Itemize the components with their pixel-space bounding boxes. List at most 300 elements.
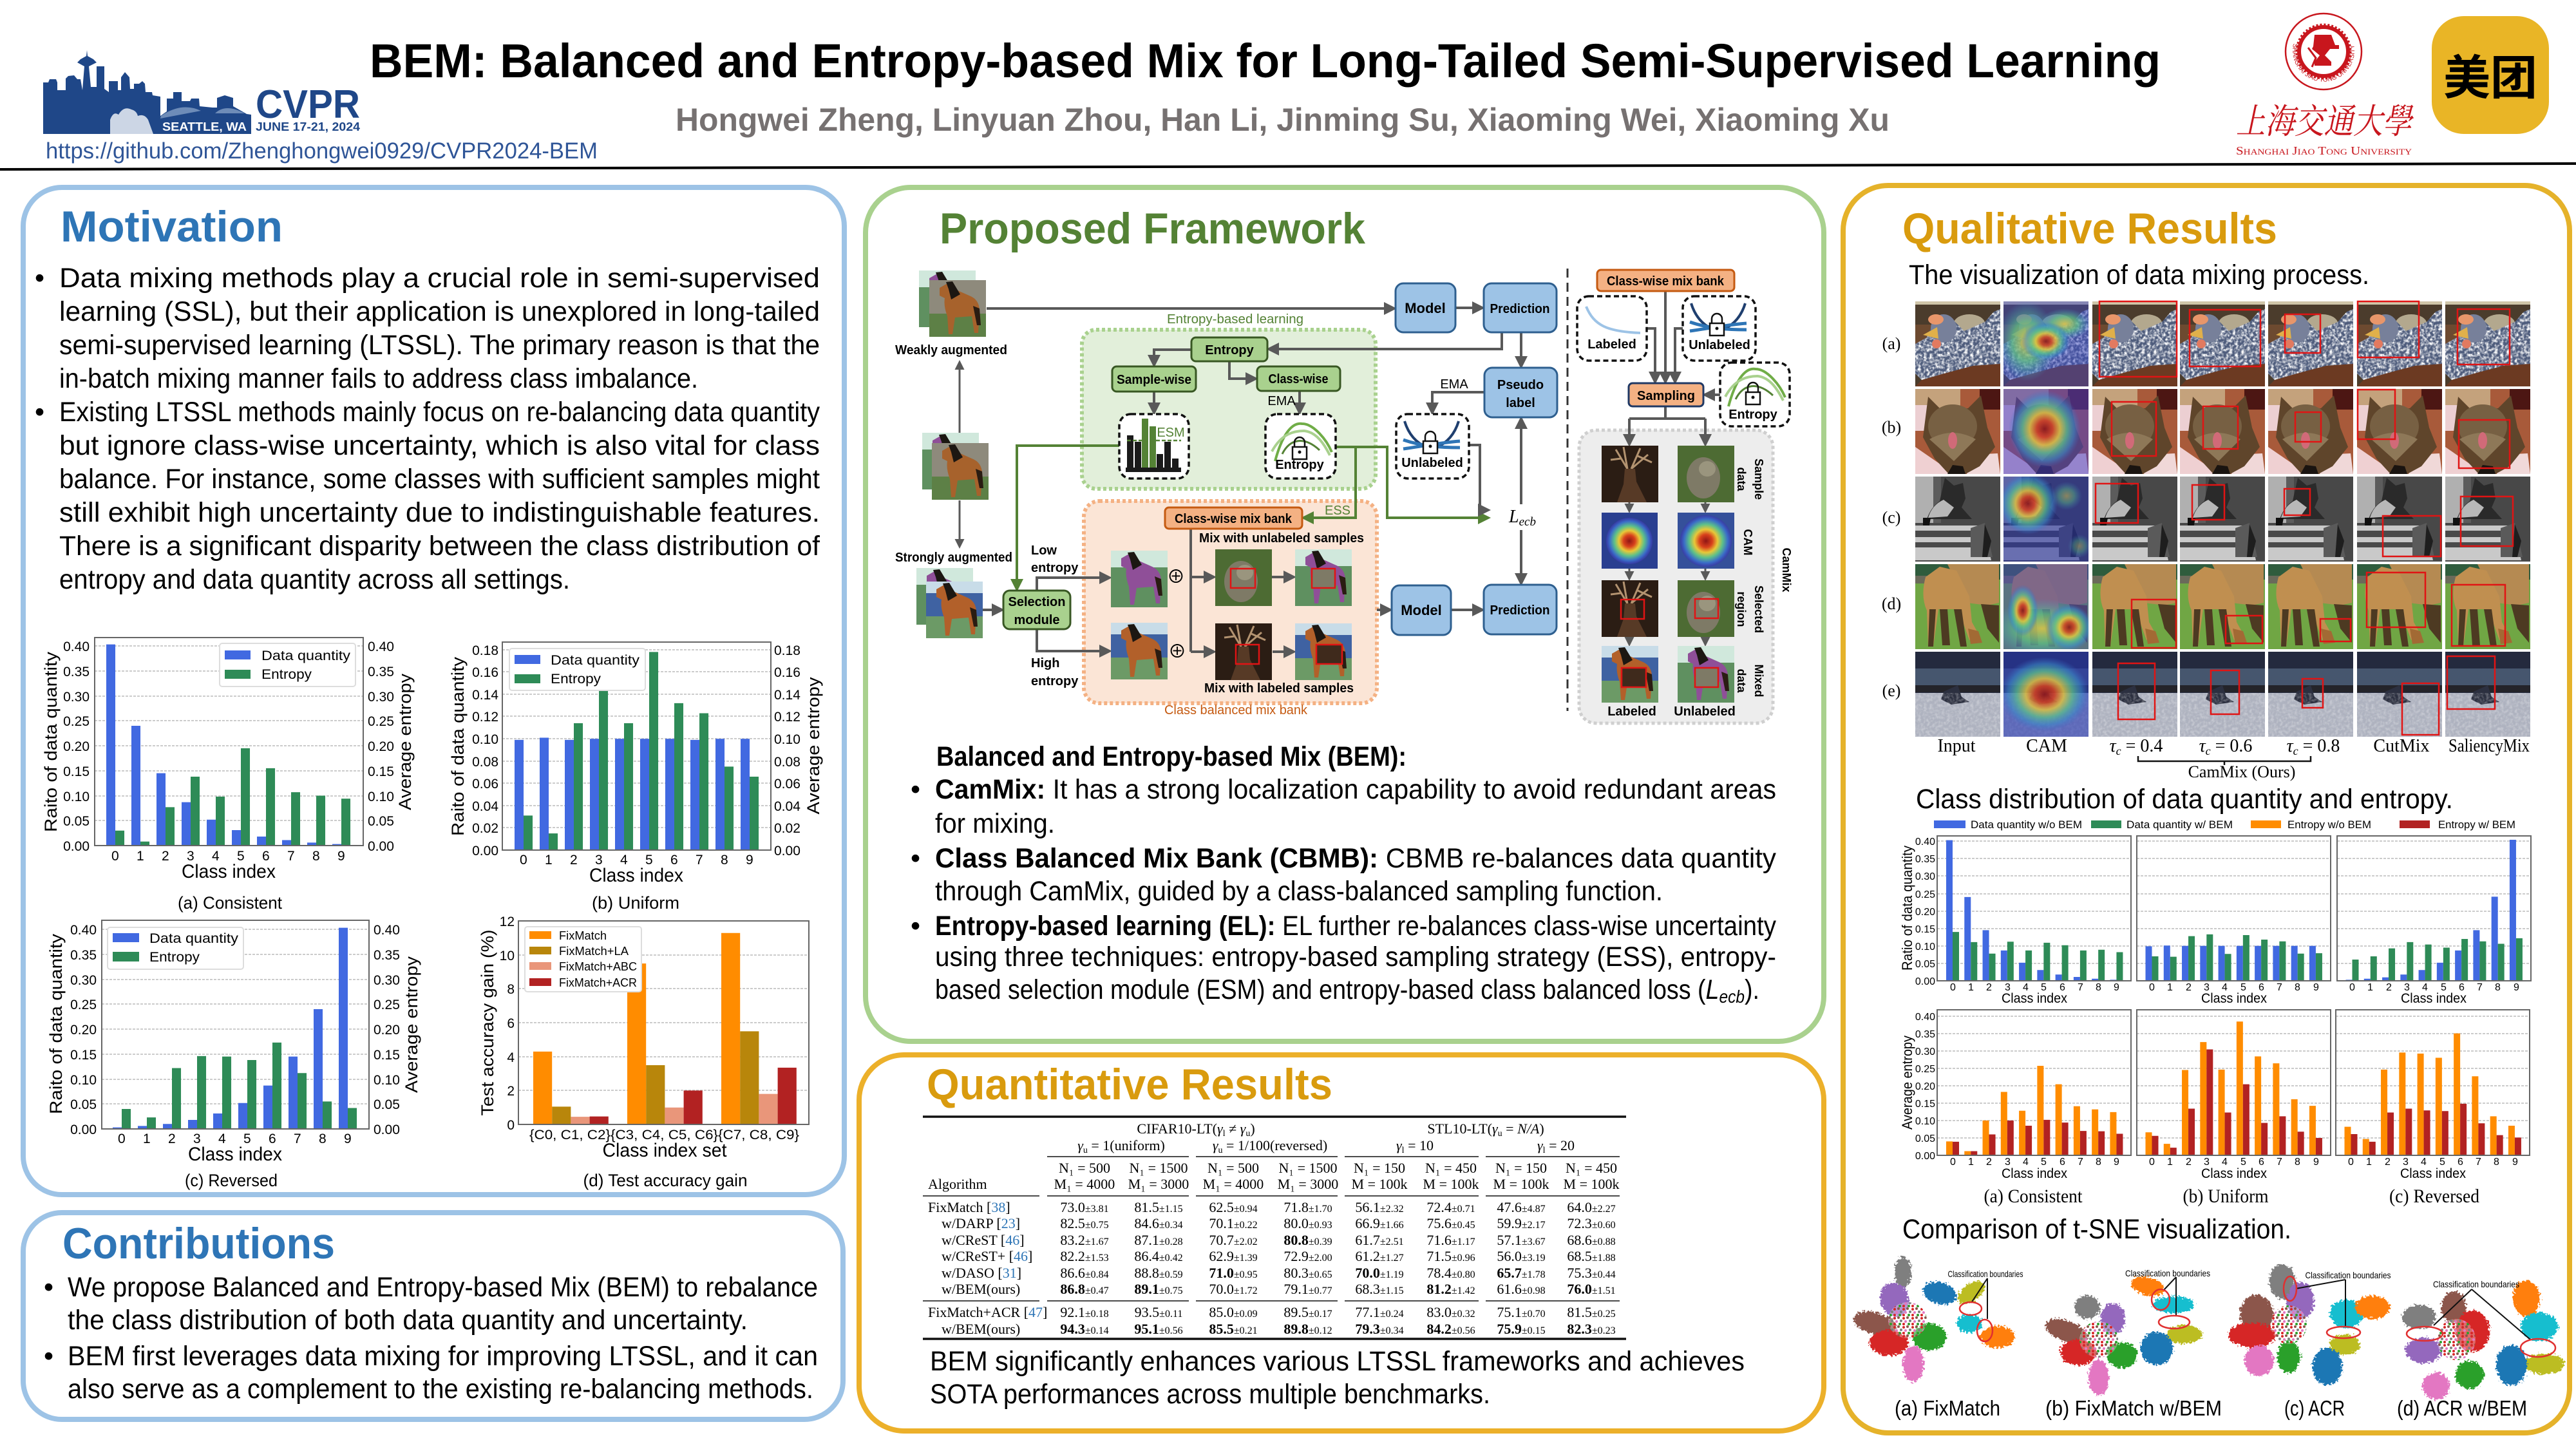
legend: chart a: Data quantity [261,649,351,663]
label: mix with unlabeled samples: Mix with unlabeled samples [1199,531,1364,545]
column labels: CutMix [2373,736,2430,756]
captions: t-SNE: (c) ACR [2284,1396,2345,1420]
subheading: t-SNE: Comparison of t-SNE visualization. [1902,1214,2291,1245]
caption: chart b: (b) Uniform [592,893,679,913]
table: results: 47.6±4.87 [1497,1199,1546,1215]
table: results: 68.3±1.15 [1355,1281,1404,1297]
brace: cammix ours [2138,756,2311,781]
scatter: t-SNE ACR w/BEM [2402,1279,2564,1399]
icon: unlabeled cammix [1683,296,1756,361]
table: results: 76.0±1.51 [1567,1281,1616,1297]
labels: entropy routes: Low [1031,544,1057,558]
table: results: 80.0±0.93 [1283,1215,1332,1231]
images: input samples [922,433,989,500]
header rule [0,164,2576,169]
bar chart: (b) uniform: 0.18 [472,643,498,658]
node: selection module: Selection [1009,595,1065,609]
icon: labeled [1577,296,1647,361]
text block: motivation: but ignore class-wise uncertainty, which is also vital for class [59,430,820,461]
labels: entropy routes [1031,544,1079,688]
caption: chart d: (d) Test accuracy gain [583,1171,747,1190]
bar chart: (c) reversed: Class index [188,1144,282,1165]
legend: chart c: Entropy [149,950,200,965]
node: class-wise mix bank [1165,504,1350,529]
panel: qualitative results [1843,185,2570,1433]
node: class-wise mix bank: Class-wise mix bank [1175,512,1293,526]
table: results: 70.0±1.19 [1355,1265,1404,1281]
panel: motivation [23,187,844,1195]
region: entropy-based learning: Entropy-based learning [1167,312,1303,327]
logo: Shanghai Jiao Tong University [2236,13,2414,157]
row labels: (a) [1882,334,1900,353]
table: results: 82.2±1.53 [1060,1248,1109,1264]
captions: t-SNE: (b) FixMatch w/BEM [2045,1396,2222,1420]
table: results: u [1083,1146,1088,1155]
bar chart: (c) reversed: Average entropy [402,956,421,1093]
bar chart: data quantity uniform: Class index [2201,991,2267,1006]
bar chart: (a) consistent: Class index [182,861,276,882]
bar chart: (c) reversed: 0.35 [70,948,97,963]
labels: EMA [1267,377,1468,408]
bar chart: (c) reversed: 0.25 [374,998,400,1012]
table: results: 72.9±2.00 [1283,1248,1332,1264]
bar chart: (c) reversed: 0.00 [70,1122,97,1137]
table: results: 85.5±0.21 [1209,1321,1258,1337]
column labels [1937,736,2530,757]
heading: proposed framework: Proposed Framework [940,204,1365,253]
table: results: 61.2±1.27 [1355,1248,1404,1264]
bar chart: (a) consistent [41,638,415,913]
legend: chart d [525,927,641,992]
bar chart: (a) consistent: 0.15 [368,764,394,779]
region: entropy-based learning [1082,312,1376,489]
table: results: 71.8±1.70 [1283,1199,1332,1215]
images: weakly augmented samples: Weakly augmented [895,343,1007,357]
captions: distribution charts: (c) Reversed [2389,1186,2479,1207]
table: results: 59.9±2.17 [1497,1215,1546,1231]
bar chart: (c) reversed: 0.15 [70,1048,97,1063]
bar chart: data quantity consistent: 0123456789 [1950,982,2119,993]
table: results: w/CReST+ [46] [942,1248,1032,1264]
bar chart: entropy consistent: 0.10 [1915,1116,1935,1127]
logo: Meituan: 美团 [2443,52,2537,104]
heading: motivation: Motivation [61,202,283,251]
table: results: 86.4±0.42 [1134,1248,1183,1264]
region: class balanced mix bank [1084,501,1377,717]
bar chart: (a) consistent: 0.20 [368,739,394,754]
bar chart: (d) test accuracy gain: 4 [507,1050,515,1065]
icon: entropy: Entropy [1275,458,1325,472]
repository link: https://github.com/Zhenghongwei0929/CVPR2024-BEM [46,138,598,164]
legend: chart a: Entropy [261,667,312,682]
table: results: 75.3±0.44 [1567,1265,1616,1281]
bar chart: (c) reversed: 0.40 [374,923,400,938]
table: results: = 10 [1405,1137,1434,1153]
bar chart: (b) uniform: 0.00 [774,844,800,858]
images: weakly augmented samples [895,270,1007,357]
table: results: FixMatch+ACR [47] [928,1304,1047,1320]
title: BEM: Balanced and Entropy-based Mix for Long-Tailed Semi-Supervised Learning [370,34,2161,88]
icon: entropy [1265,414,1336,478]
row labels: (e) [1882,681,1900,700]
table: results: 62.9±1.39 [1209,1248,1258,1264]
bar chart: (b) uniform: 0.12 [472,710,498,724]
brace: cammix ours: CamMix (Ours) [2188,762,2295,781]
legend: chart b: Data quantity [551,653,640,668]
scatter: t-SNE ACR w/BEM: Classification boundaries [2433,1279,2519,1289]
table: results: l [1223,1129,1226,1139]
text block: BEM summary: Balanced and Entropy-based Mix (BEM): [936,741,1406,772]
text block: contributions: also serve as a complement to the existing re-balancing methods. [68,1374,813,1405]
heading: qualitative results: Qualitative Results [1902,204,2277,253]
bar chart: entropy consistent: 0.05 [1915,1133,1935,1144]
text block: quantitative conclusion: SOTA performances across multiple benchmarks. [930,1379,1490,1410]
table: results: 70.0±1.72 [1209,1281,1258,1297]
labels: EMA: EMA [1267,394,1296,408]
labels: cammix rotated: region [1735,591,1748,627]
text block: BEM summary: • [911,911,920,942]
text block: motivation: still exhibit high uncertainty due to indistinguishable features. [59,497,820,528]
bar chart: (b) uniform: 0123456789 [520,853,753,867]
node: model bottom [1392,585,1451,635]
subheading: class distribution: Class distribution of data quantity and entropy. [1916,784,2453,815]
table: results: γ [1240,1121,1247,1137]
bar chart: entropy uniform [2137,1010,2331,1181]
region: class balanced mix bank: Class balanced mix bank [1164,703,1308,717]
table: results: u [1245,1129,1250,1139]
table: results: N₁ = 450 [1425,1160,1477,1176]
node: prediction bottom: Prediction [1490,603,1549,618]
text block: motivation: • [35,263,44,294]
bar chart: (b) uniform: 0.14 [774,688,800,703]
node: sample-wise [1112,366,1196,392]
table: results: 89.1±0.75 [1134,1281,1183,1297]
text block: BEM summary: • [911,774,920,805]
bar chart: entropy consistent [1899,1010,2131,1181]
bar chart: (a) consistent: 0.20 [63,739,90,754]
labels: cammix rotated: Selected [1752,585,1765,633]
images: strongly augmented samples [895,551,1012,638]
table: results: 86.8±0.47 [1060,1281,1109,1297]
table: results: 75.1±0.70 [1497,1304,1546,1320]
bar chart: (b) uniform: 0.06 [472,777,498,791]
text block: contributions: the class distribution of both data quantity and uncertainty. [68,1305,748,1336]
table: results: M₁ = 4000 [1203,1176,1264,1192]
row c [1915,473,2530,562]
labels: cammix rotated: data [1735,668,1748,693]
captions: distribution charts [1984,1186,2479,1207]
node: selection module: module [1014,613,1060,627]
table: results: ≠ [1226,1121,1240,1137]
bar chart: (b) uniform: 0.18 [774,643,800,658]
bar chart: (b) uniform: 0.08 [774,755,800,770]
text block: motivation: Data mixing methods play a crucial role in semi-supervised [59,263,820,294]
table: results [923,1117,1626,1339]
table: results: γ [1537,1137,1544,1153]
node: model bottom: Model [1401,602,1442,618]
legend: chart c: Data quantity [149,931,239,946]
bar chart: (b) uniform: Class index [589,865,683,886]
column labels: c [2116,744,2121,757]
authors: Hongwei Zheng, Linyuan Zhou, Han Li, Jinming Su, Xiaoming Wei, Xiaoming Xu [676,102,1889,138]
bar chart: (c) reversed: 0.30 [70,973,97,988]
bar chart: entropy consistent: Class index [2002,1166,2067,1181]
text block: BEM summary: • [911,843,920,874]
icon: entropy cammix: Entropy [1728,408,1778,422]
labels: cammix rotated: CAM [1741,529,1754,555]
legend: chart d: FixMatch [559,929,607,942]
images: strongly augmented samples: Strongly augmented [895,551,1012,565]
table: results: 72.4±0.71 [1426,1199,1475,1215]
logo: CVPR: CVPR [256,82,360,127]
table: results: 89.8±0.12 [1283,1321,1332,1337]
bar chart: (a) consistent: 0.25 [368,714,394,729]
table: results: 94.3±0.14 [1060,1321,1109,1337]
legend: chart b [509,649,645,690]
bar chart: (c) reversed: 0.15 [374,1048,400,1063]
bar chart: (b) uniform: 0.16 [472,665,498,680]
table: results: γ [1077,1137,1084,1153]
table: results: 79.3±0.34 [1355,1321,1404,1337]
bar chart: (d) test accuracy gain: Test accuracy gain (%) [478,930,497,1115]
node: prediction top: Prediction [1490,302,1549,316]
bar chart: entropy consistent: 0.20 [1915,1081,1935,1092]
scatter: t-SNE ACR: Classification boundaries [2306,1270,2391,1280]
arrows: framework flow [960,291,1720,652]
text block: motivation: entropy and data quantity across all settings. [59,564,570,595]
bar chart: (c) reversed: 0.40 [70,923,97,938]
bar chart: (d) test accuracy gain [478,914,809,1190]
panel: contributions [23,1213,843,1419]
bar chart: (d) test accuracy gain: {C0, C1, C2}{C3, C4, C5, C6}{C7, C8, C9} [529,1128,799,1142]
captions: t-SNE [1895,1396,2527,1420]
row labels: (b) [1882,418,1901,437]
text block: motivation: balance. For instance, some classes with sufficient samples might [59,464,820,495]
table: results: FixMatch [38] [928,1199,1010,1215]
bar chart: data quantity consistent [1899,836,2131,1006]
table: results: 71.5±0.96 [1426,1248,1475,1264]
table: results: 68.5±1.88 [1567,1248,1616,1264]
node: class-wise mix bank cammix [1597,270,1734,291]
table: results: 82.3±0.23 [1567,1321,1616,1337]
row b [1915,389,2530,474]
bar chart: data quantity consistent: 0.00 [1915,976,1935,987]
table: results: γ [1396,1137,1403,1153]
table: results: γ [1213,1137,1219,1153]
table: results: N₁ = 500 [1059,1160,1110,1176]
bar chart: (b) uniform: Raito of data quantity [448,656,468,836]
scatter: t-SNE FixMatch w/BEM: Classification boundaries [2125,1268,2210,1278]
bar chart: (a) consistent: 0.05 [368,814,394,829]
captions: distribution charts: (a) Consistent [1984,1186,2083,1207]
column labels: CAM [2026,736,2067,756]
captions: t-SNE: (d) ACR w/BEM [2397,1396,2527,1420]
table: results: 89.5±0.17 [1283,1304,1332,1320]
text block: BEM summary: using three techniques: entropy-based sampling strategy (ESS), entropy- [935,942,1776,972]
text block: BEM summary: through CamMix, guided by a class-balanced sampling function. [935,876,1663,907]
table: results: 71.0±0.95 [1209,1265,1258,1281]
bar chart: (c) reversed [46,920,421,1190]
legend: bem comparison: Data quantity w/ BEM [2126,819,2233,831]
bar chart: (d) test accuracy gain: 10 [500,949,515,963]
icon: entropy cammix [1720,363,1790,426]
bar chart: (b) uniform: 0.12 [774,710,800,724]
column labels: Input [1937,736,1976,756]
table: results: N₁ = 1500 [1279,1160,1337,1176]
bar chart: entropy consistent: Average entropy [1899,1036,1915,1130]
table: results: 56.1±2.32 [1355,1199,1404,1215]
logo: Shanghai Jiao Tong University: SHANGHAI JIAO TONG UNIVERSITY [2293,44,2354,82]
row e [1915,652,2530,737]
legend: chart b: Entropy [551,672,601,687]
captions: distribution charts: (b) Uniform [2183,1186,2268,1207]
table: results: 80.3±0.65 [1283,1265,1332,1281]
text block: BEM summary: CamMix: It has a strong localization capability to avoid redundant areas [935,774,1776,805]
text block: BEM summary: for mixing. [935,808,1055,839]
bar chart: entropy consistent: 0.15 [1915,1099,1935,1110]
node: pseudo label: Pseudo [1497,378,1544,392]
bar chart: entropy uniform: Class index [2201,1166,2267,1181]
table: results: w/DARP [23] [942,1215,1020,1231]
text block: motivation: in-batch mixing manner fails to address class imbalance. [59,363,698,394]
table: results: M = 100k [1423,1176,1479,1192]
table: results: 79.1±0.77 [1283,1281,1332,1297]
text block: quantitative conclusion: BEM significantly enhances various LTSSL frameworks and achieves [930,1346,1745,1377]
bar chart: entropy consistent: 0.40 [1915,1012,1935,1023]
bar chart: (b) uniform: 0.04 [472,799,498,814]
labels: entropy routes: High [1031,656,1059,670]
bar chart: (b) uniform [448,642,823,913]
table: results: 68.6±0.88 [1567,1232,1616,1248]
node: entropy: Entropy [1205,343,1255,357]
bar chart: (d) test accuracy gain: 8 [507,982,515,997]
table: results: 61.7±2.51 [1355,1232,1404,1248]
table: results: w/BEM(ours) [942,1321,1020,1337]
bar chart: (b) uniform: 0.06 [774,777,800,791]
column labels: SaliencyMix [2448,736,2530,756]
logo: Shanghai Jiao Tong University: 上海交通大學 [2236,102,2414,141]
labels: entropy routes: entropy [1031,674,1079,688]
legend: bem comparison: Data quantity w/o BEM [1971,819,2082,831]
bar chart: (a) consistent: 0.10 [368,790,394,804]
node: prediction bottom [1484,585,1557,634]
scatter: t-SNE ACR [2228,1264,2391,1385]
table: results: 62.5±0.94 [1209,1199,1258,1215]
bar chart: (c) reversed: 0.25 [70,998,97,1012]
heading: quantitative results: Quantitative Results [927,1060,1332,1109]
table: results: = 20 [1546,1137,1575,1153]
images: cammix steps: Labeled [1607,705,1656,719]
column labels: c [2293,744,2298,757]
bar chart: data quantity consistent: 0.30 [1915,871,1935,882]
table: results: 70.1±0.22 [1209,1215,1258,1231]
images: low entropy mixing [1111,549,1352,607]
table: results: w/DASO [31] [942,1265,1021,1281]
logo: CVPR: SEATTLE, WA [162,120,247,133]
bar chart: (a) consistent: 0.30 [368,690,394,705]
bar chart: entropy consistent: 0.35 [1915,1029,1935,1040]
labels: cammix rotated: Sample [1752,459,1765,500]
bar chart: data quantity consistent: Ratio of data quantity [1899,846,1915,971]
bar chart: (a) consistent: Raito of data quantity [41,651,61,832]
bar chart: (b) uniform: 0.10 [472,732,498,747]
table: results: 75.9±0.15 [1497,1321,1546,1337]
table: results: 81.5±0.25 [1567,1304,1616,1320]
node: class-wise [1257,366,1340,391]
table: results: 65.7±1.78 [1497,1265,1546,1281]
table: results: M₁ = 3000 [1128,1176,1189,1192]
table: results: 77.1±0.24 [1355,1304,1404,1320]
column labels: c [2206,744,2211,757]
labels: cammix rotated: CamMix [1780,547,1793,592]
column labels: τ [2110,736,2117,756]
icon: unlabeled: Unlabeled [1401,456,1463,470]
row a [1915,301,2530,386]
bar chart: (b) uniform: 0.00 [472,844,498,858]
text block: contributions [44,1272,818,1405]
node: class-wise: Class-wise [1269,372,1328,386]
text block: contributions: • [44,1272,53,1303]
column labels: τ [2287,736,2294,756]
bar chart: data quantity consistent: 0.40 [1915,837,1935,848]
bar chart: (c) reversed: 0.20 [374,1023,400,1037]
bar chart: (c) reversed: Raito of data quantity [46,933,66,1114]
bar chart: data quantity uniform: 0123456789 [2149,982,2319,993]
scatter: t-SNE FixMatch: Classification boundaries [1947,1269,2023,1279]
bar chart: (d) test accuracy gain: 0 [507,1118,515,1133]
text block: contributions: • [44,1341,53,1372]
table: results: 71.6±1.17 [1426,1232,1475,1248]
label: mix with labeled samples: Mix with labeled samples [1204,681,1354,696]
bar chart: entropy consistent: 0.25 [1915,1064,1935,1075]
row labels: (c) [1882,508,1900,527]
table: results: N₁ = 450 [1566,1160,1617,1176]
table: results: M₁ = 3000 [1278,1176,1338,1192]
bar chart: (a) consistent: 0.35 [368,665,394,679]
bar chart: (a) consistent: Average entropy [395,673,415,810]
text block: BEM summary: ). [1745,974,1759,1005]
bar chart: data quantity uniform [2137,836,2331,1006]
bar chart: data quantity reversed: Class index [2401,991,2467,1006]
bar chart: (c) reversed: 0.10 [70,1073,97,1088]
table: results: 72.3±0.60 [1567,1215,1616,1231]
bar chart: (c) reversed: 0.35 [374,948,400,963]
bar chart: data quantity consistent: 0.25 [1915,889,1935,900]
table: results: N₁ = 1500 [1130,1160,1188,1176]
table: results: N₁ = 150 [1354,1160,1405,1176]
table: results: 73.0±3.81 [1060,1199,1109,1215]
labels: EMA: EMA [1440,377,1468,392]
bar chart: data quantity consistent: 0.10 [1915,942,1935,952]
table: results: 57.1±3.67 [1497,1232,1546,1248]
table: results: 87.1±0.28 [1134,1232,1183,1248]
heading: contributions: Contributions [62,1219,335,1268]
bar chart: (b) uniform: 0.10 [774,732,800,747]
bar chart: (b) uniform: 0.16 [774,665,800,680]
table: results: u [1498,1129,1502,1139]
panel: proposed framework [866,187,1824,1041]
bar chart: data quantity consistent: 0.05 [1915,959,1935,970]
table: results: 56.0±3.19 [1497,1248,1546,1264]
bar chart: (c) reversed: 0.05 [70,1097,97,1112]
text block: motivation: • [35,397,44,428]
table: results: ) [1250,1121,1255,1137]
formula: ecb loss: ecb [1519,515,1536,529]
legend: bem comparison: Entropy w/o BEM [2287,819,2371,831]
table: results: 83.2±1.67 [1060,1232,1109,1248]
logo: Shanghai Jiao Tong University: Shanghai Jiao Tong University [2236,144,2412,157]
table: results: 88.8±0.59 [1134,1265,1183,1281]
